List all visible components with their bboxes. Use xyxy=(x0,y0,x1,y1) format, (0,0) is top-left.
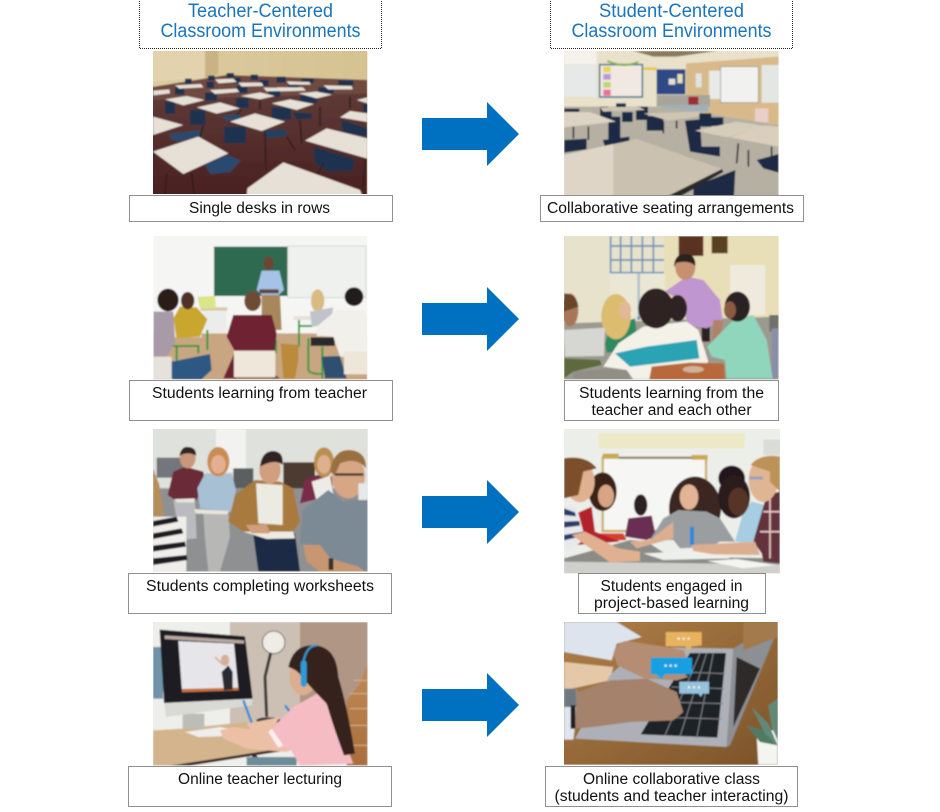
monitor xyxy=(160,630,253,729)
caption: online teacher lecturing: Online teacher lecturing xyxy=(178,771,342,788)
girl in striped top xyxy=(630,477,735,548)
chat bubbles xyxy=(651,632,709,697)
photo: hands on laptop with chat bubbles xyxy=(562,619,780,767)
arrow: row 1 xyxy=(422,102,519,166)
photo: students completing worksheets xyxy=(150,427,372,575)
column heading: student-centered: Student-Centered xyxy=(599,1,744,22)
caption: single desks in rows xyxy=(130,196,392,222)
caption: students engaged in project-based learning: Students engaged in xyxy=(600,578,742,595)
column heading: teacher-centered xyxy=(140,0,382,48)
arrow: row 4 xyxy=(422,673,519,737)
photo: single desks in rows xyxy=(150,48,370,197)
photo: teacher at board with students in rows xyxy=(151,233,371,382)
laptop xyxy=(575,622,778,747)
boys on left xyxy=(564,458,640,562)
arrow: row 2 xyxy=(422,287,519,351)
caption: students learning from the teacher and each other xyxy=(564,380,778,420)
potted plant xyxy=(747,699,778,765)
caption: collaborative seating arrangements xyxy=(540,196,804,222)
caption: students completing worksheets xyxy=(128,574,392,614)
caption: online teacher lecturing xyxy=(128,766,392,806)
student in brown jacket xyxy=(228,451,300,572)
striped student at left xyxy=(153,468,187,572)
caption: students learning from teacher: Students learning from teacher xyxy=(152,385,367,402)
desk lamp xyxy=(256,631,285,723)
girl with headset xyxy=(220,645,355,766)
background student xyxy=(625,494,656,540)
photo: girl watching online lecture on a monitor xyxy=(150,619,372,769)
teacher xyxy=(257,256,284,330)
column heading: teacher-centered: Classroom Environments xyxy=(160,21,360,42)
caption: students learning from teacher xyxy=(130,380,392,420)
caption: students learning from the teacher and each other: Students learning from the xyxy=(579,385,764,402)
caption: students learning from the teacher and each other: teacher and each other xyxy=(592,402,752,419)
column heading: teacher-centered: Teacher-Centered xyxy=(188,1,333,22)
arrow: row 3 xyxy=(422,480,519,544)
desk xyxy=(153,722,268,766)
back row students xyxy=(168,447,334,572)
caption: single desks in rows: Single desks in rows xyxy=(189,200,330,217)
photo: students engaged in project-based learning xyxy=(562,427,782,575)
caption: online collaborative class: (students and teacher interacting) xyxy=(554,788,788,805)
caption: students engaged in project-based learning xyxy=(578,574,766,614)
caption: online collaborative class xyxy=(546,766,798,806)
chalkboard xyxy=(214,247,288,296)
caption: collaborative seating arrangements: Collaborative seating arrangements xyxy=(547,200,794,217)
hands xyxy=(564,641,688,740)
student in grey polo xyxy=(300,450,368,572)
students xyxy=(153,287,367,379)
caption: students engaged in project-based learning: project-based learning xyxy=(594,595,749,612)
column heading: student-centered xyxy=(550,0,792,48)
caption: online collaborative class: Online collaborative class xyxy=(583,771,760,788)
photo: teacher talking with students at a table xyxy=(562,233,782,382)
teacher xyxy=(665,254,723,342)
student in striped sweater xyxy=(603,288,708,379)
student in mint sweater xyxy=(707,292,773,378)
column heading: student-centered: Classroom Environments xyxy=(572,21,772,42)
photo: collaborative seating classroom xyxy=(562,48,782,198)
students on right xyxy=(692,456,780,563)
caption: students completing worksheets: Students completing worksheets xyxy=(146,578,374,595)
